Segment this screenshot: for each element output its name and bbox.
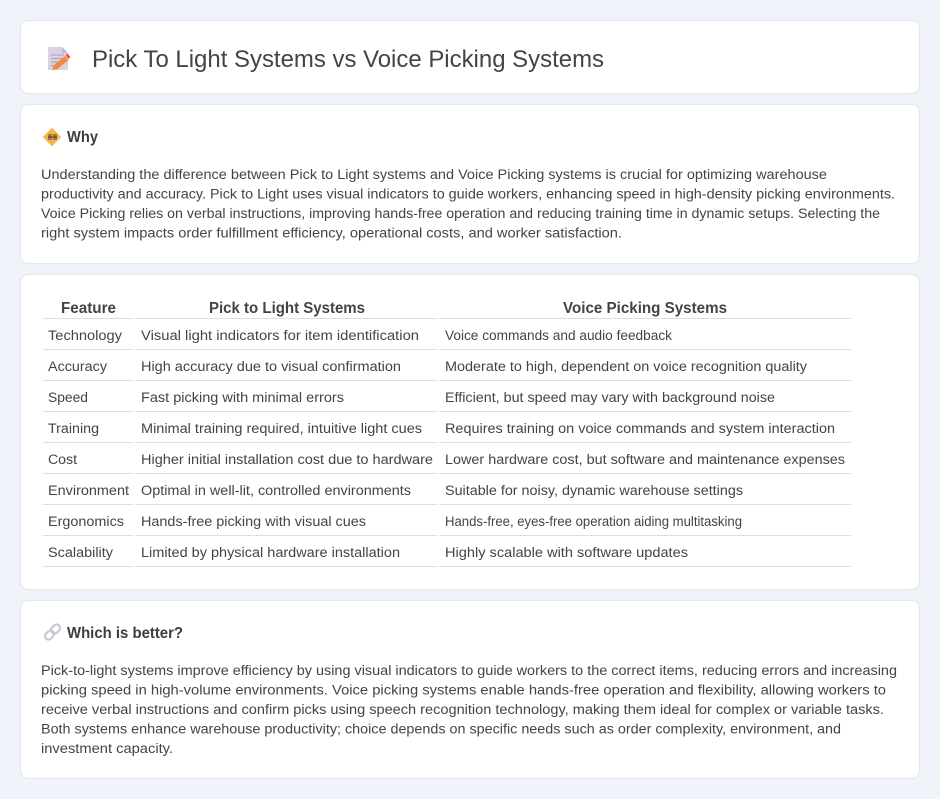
row: ergonomics	[48, 514, 742, 530]
row: technology	[48, 328, 673, 344]
row: training: Minimal training required, intuitive light cues	[141, 421, 422, 437]
why paragraph	[41, 167, 895, 242]
row: training: Training	[48, 421, 99, 437]
row: speed: Efficient, but speed may vary with background noise	[445, 390, 775, 406]
row: environment: Environment	[48, 483, 129, 499]
panel: why	[20, 104, 920, 264]
icon: document with pencil	[48, 47, 70, 70]
row: scalability: Scalability	[48, 545, 114, 561]
heading: why: Why	[67, 129, 98, 146]
row: technology: Voice commands and audio feedback	[445, 328, 673, 344]
row: cost: Higher initial installation cost due to hardware	[141, 452, 433, 468]
row: technology: Visual light indicators for item identification	[141, 328, 419, 344]
row: speed: Fast picking with minimal errors	[141, 390, 344, 406]
heading: which is better: Which is better?	[67, 625, 183, 642]
panel: comparison table	[20, 274, 920, 590]
row: scalability	[48, 545, 688, 561]
table header: Pick to Light Systems	[209, 300, 365, 317]
row: environment	[48, 483, 743, 499]
row: scalability: Limited by physical hardware installation	[141, 545, 400, 561]
which is better paragraph	[41, 663, 897, 757]
row: training	[48, 421, 835, 437]
table header	[61, 300, 727, 317]
icon: chain link	[43, 623, 62, 641]
row: scalability: Highly scalable with software updates	[445, 545, 688, 561]
which is better paragraph: Pick-to-light systems improve efficiency by using visual indicators to guide workers to the correct items, reducing errors and increasing	[41, 663, 897, 679]
row: ergonomics: Hands-free, eyes-free operation aiding multitasking	[445, 514, 742, 530]
why paragraph: right system impacts order fulfillment efficiency, operational costs, and worker satisfaction.	[41, 226, 622, 242]
table header: Voice Picking Systems	[563, 300, 727, 317]
which is better paragraph: investment capacity.	[41, 741, 173, 757]
row: speed: Speed	[48, 390, 88, 406]
row: environment: Optimal in well-lit, controlled environments	[141, 483, 411, 499]
which is better paragraph: picking speed in high-volume environments. Voice picking systems enable hands-free operation and flexibility, allowing workers to	[41, 682, 886, 698]
row: cost: Cost	[48, 452, 77, 468]
which is better paragraph: Both systems enhance warehouse productivity; choice depends on specific needs such as order complexity, environment, and	[41, 722, 841, 738]
row: speed	[48, 390, 775, 406]
row: cost: Lower hardware cost, but software and maintenance expenses	[445, 452, 845, 468]
row: training: Requires training on voice commands and system interaction	[445, 421, 835, 437]
why paragraph: productivity and accuracy. Pick to Light uses visual indicators to guide workers, enhancing speed in high-density picking environments.	[41, 186, 895, 202]
table rules	[43, 318, 851, 566]
icon: warning diamond	[44, 128, 60, 146]
title: Pick To Light Systems vs Voice Picking Systems	[92, 46, 604, 73]
row: accuracy: Moderate to high, dependent on voice recognition quality	[445, 359, 808, 375]
row: cost	[48, 452, 845, 468]
table header: Feature	[61, 300, 116, 317]
panel: title header	[20, 20, 920, 94]
row: accuracy	[48, 359, 808, 375]
why paragraph: Understanding the difference between Pick to Light systems and Voice Picking systems is crucial for optimizing warehouse	[41, 167, 827, 183]
row: accuracy: Accuracy	[48, 359, 108, 375]
panel: which is better	[20, 600, 920, 778]
row: accuracy: High accuracy due to visual confirmation	[141, 359, 401, 375]
row: technology: Technology	[48, 328, 123, 344]
row: ergonomics: Ergonomics	[48, 514, 124, 530]
which is better paragraph: receive verbal instructions and confirm picks using speech recognition technology, making them ideal for complex or variable tasks.	[41, 702, 884, 718]
row: ergonomics: Hands-free picking with visual cues	[141, 514, 366, 530]
row: environment: Suitable for noisy, dynamic warehouse settings	[445, 483, 743, 499]
why paragraph: Voice Picking relies on verbal instructions, improving hands-free operation and reducing training time in dynamic setups. Selecting the	[41, 206, 880, 222]
